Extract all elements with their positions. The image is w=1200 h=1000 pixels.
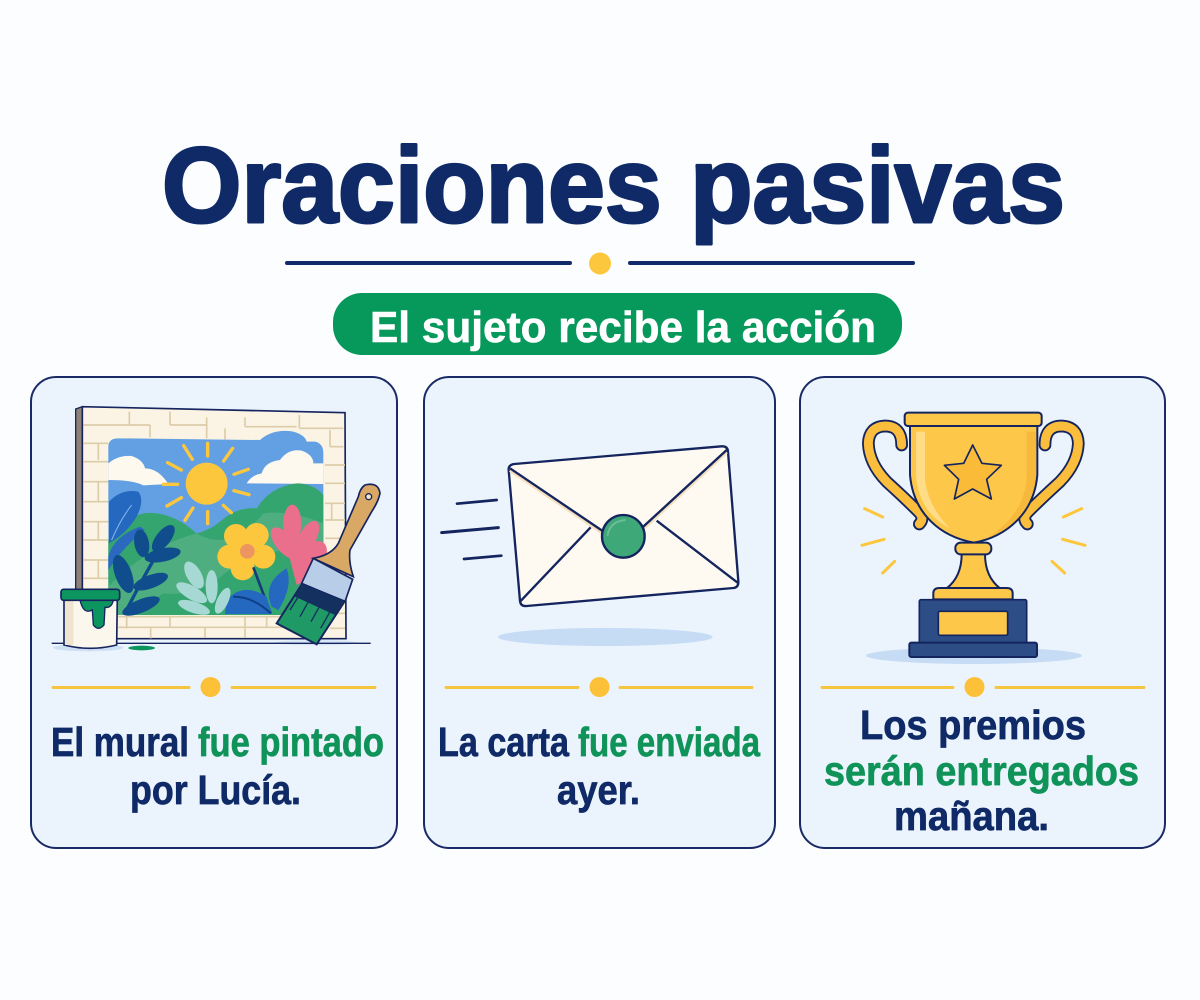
title divider (287, 252, 913, 274)
sentence: trophy: Los premios (860, 702, 1086, 748)
sentence: mural (51, 719, 384, 813)
icon: trophy (862, 413, 1085, 664)
panel: letter (424, 377, 775, 848)
icon: mural with paint can and brush (52, 407, 380, 651)
sentence: letter (438, 719, 761, 813)
sentence: trophy: mañana. (894, 793, 1049, 839)
card divider (53, 677, 375, 697)
subtitle pill: El sujeto recibe la acción (370, 303, 876, 352)
sentence: trophy: serán entregados (824, 748, 1139, 794)
card divider (822, 677, 1144, 697)
panel: mural (31, 377, 397, 848)
card divider (446, 677, 752, 697)
title: Oraciones pasivas (162, 125, 1065, 245)
panel: trophy (800, 377, 1165, 848)
sentence: letter: La carta (438, 719, 570, 765)
icon: flying envelope (442, 446, 738, 646)
sentence: mural: por Lucía. (130, 767, 301, 813)
sentence: letter: ayer. (557, 767, 640, 813)
sentence: letter: fue enviada (578, 719, 761, 765)
sentence: trophy (824, 702, 1139, 839)
sentence: mural: fue pintado (198, 719, 384, 765)
sentence: mural: El mural (51, 719, 189, 765)
